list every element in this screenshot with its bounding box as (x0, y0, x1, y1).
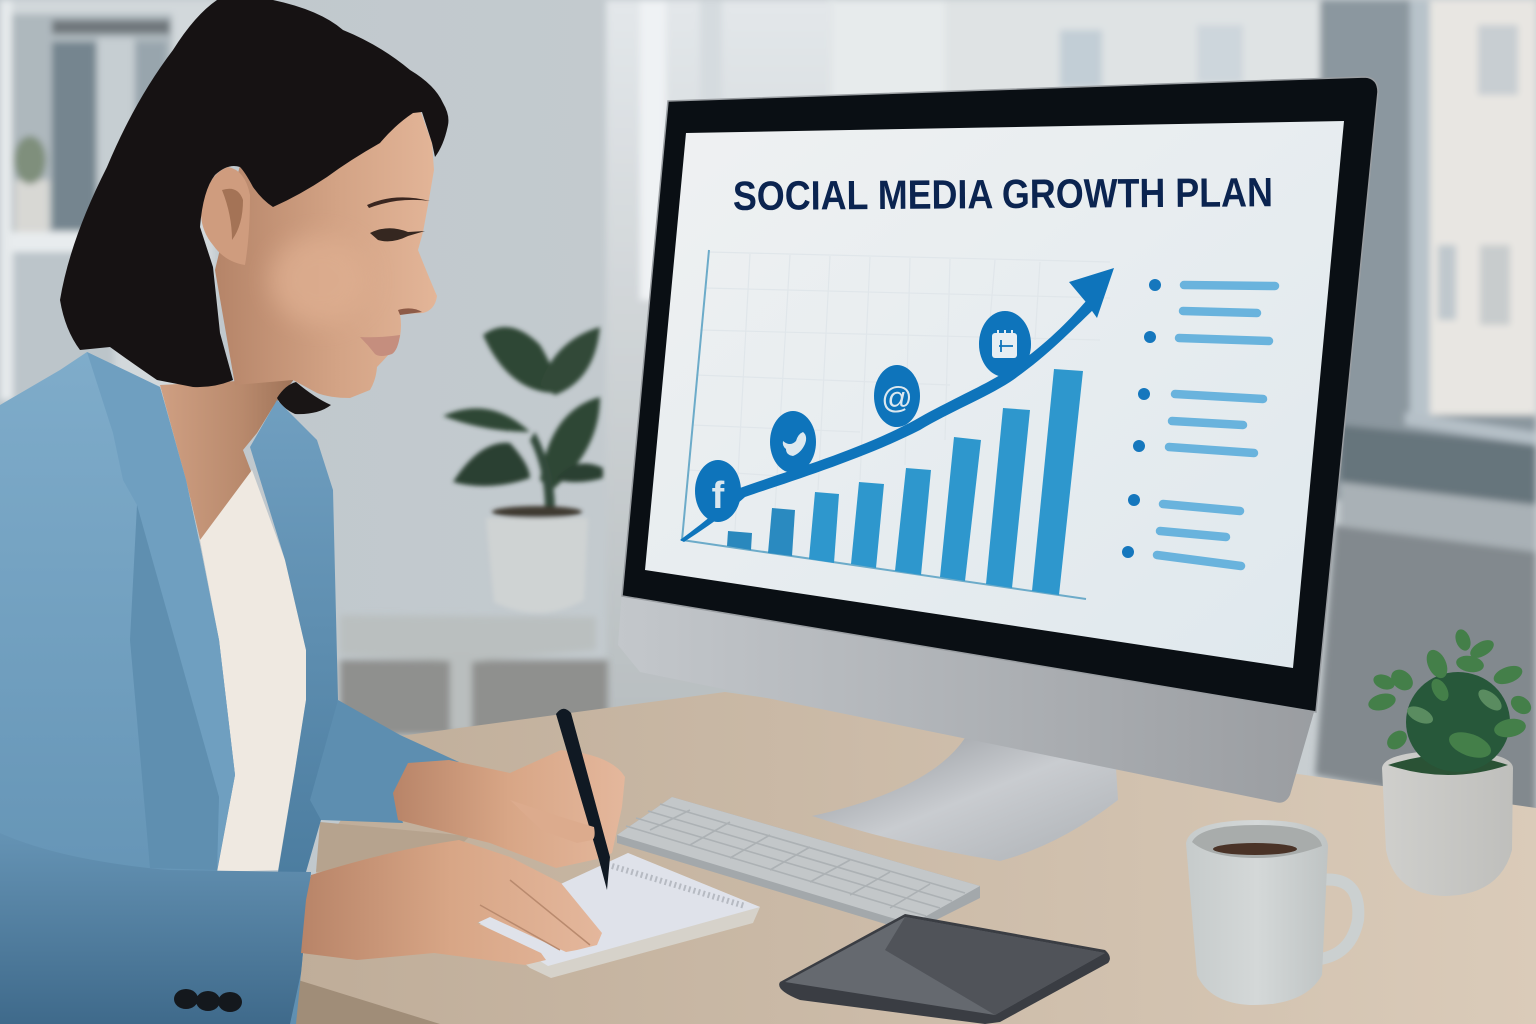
blazer body (0, 352, 311, 1024)
resting hand (301, 840, 602, 965)
eyebrow (367, 197, 430, 208)
blazer right side (250, 400, 338, 872)
growth arrow (680, 268, 1114, 542)
desk (292, 692, 1536, 1024)
coffee mug (1186, 820, 1358, 1005)
pen (556, 709, 610, 890)
background plant (443, 327, 603, 613)
blazer lapel (87, 352, 235, 870)
bookshelf with binders (0, 0, 215, 402)
cheek highlight (270, 235, 370, 325)
side table (340, 615, 608, 735)
keyboard (617, 797, 980, 932)
growth chart (680, 250, 1114, 599)
tablet (779, 914, 1110, 1024)
thumb on writing hand (510, 800, 595, 843)
ear (201, 167, 250, 265)
sleeve buttons (174, 989, 242, 1012)
neck (160, 378, 295, 560)
monitor silver chin (618, 590, 1316, 803)
monitor (618, 77, 1378, 861)
chart grid (688, 252, 1110, 530)
writing hand (393, 750, 625, 868)
monitor black bezel (622, 77, 1378, 712)
icon: at sign: @ (881, 380, 913, 415)
plant leaves (1366, 627, 1535, 772)
notepad (478, 853, 760, 978)
hair back tuft (277, 382, 331, 414)
curtain (606, 0, 834, 720)
lips (360, 335, 400, 356)
chart bars (727, 369, 1083, 595)
icon: facebook: f (712, 475, 725, 517)
white blouse (200, 470, 306, 872)
bullet list on screen (1122, 279, 1275, 566)
screen (645, 121, 1344, 668)
nostril (398, 308, 422, 315)
monitor stand (812, 738, 1118, 861)
finger creases (480, 880, 590, 950)
screen title: SOCIAL MEDIA GROWTH PLAN (733, 169, 1273, 219)
icon: twitter bird (770, 411, 816, 473)
window with blurred buildings (830, 0, 1536, 820)
blazer inner panel (130, 505, 219, 870)
lower sleeve (0, 833, 311, 1024)
face (215, 110, 437, 398)
eye (370, 228, 425, 241)
desk plant (1366, 627, 1535, 896)
plant pot (1382, 750, 1513, 896)
raised forearm sleeve (310, 700, 459, 823)
icon: calendar (979, 311, 1031, 377)
icon: at sign (874, 365, 920, 427)
hair (60, 0, 448, 387)
background plant pot (486, 518, 588, 613)
woman (0, 0, 625, 1024)
icon: facebook (695, 460, 741, 522)
chart axes (682, 250, 1086, 599)
